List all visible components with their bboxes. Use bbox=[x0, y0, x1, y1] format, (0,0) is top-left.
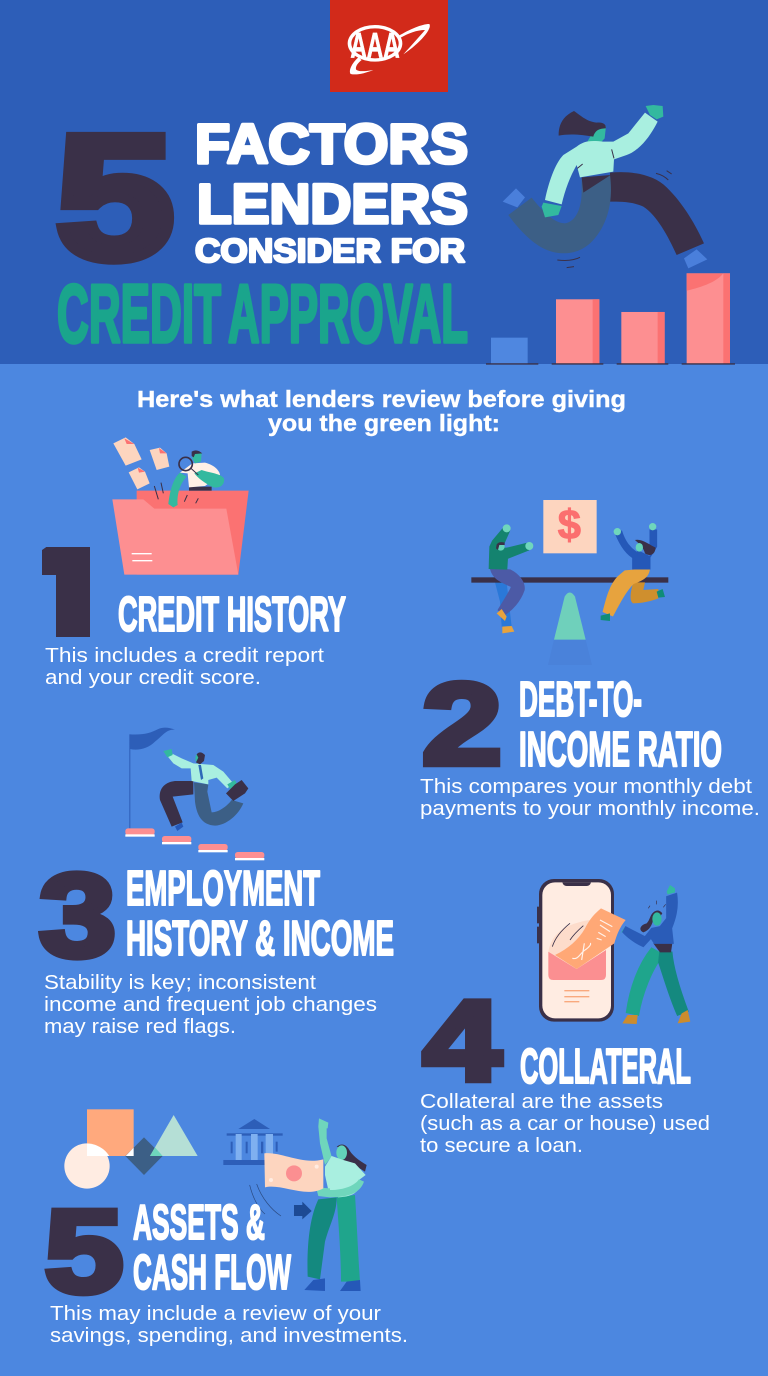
title bbox=[56, 100, 468, 360]
icon: man climbing steps to flag bbox=[125, 728, 264, 860]
title: big number 5: 5 bbox=[56, 100, 174, 296]
text block: This includes a credit report bbox=[45, 644, 324, 667]
text block: income and frequent job changes bbox=[44, 993, 377, 1016]
icon: bank and woman with cash bbox=[223, 1118, 367, 1291]
heading bbox=[126, 862, 394, 966]
icon: folder with man and documents bbox=[112, 437, 249, 575]
subtitle: Here's what lenders review before giving bbox=[137, 386, 626, 412]
heading: ASSETS & bbox=[133, 1196, 265, 1250]
panel: header band bbox=[0, 0, 768, 364]
icon: geometric shapes bbox=[64, 1109, 198, 1189]
number 4: 4 bbox=[423, 978, 501, 1105]
title: CREDIT APPROVAL: APPROVAL bbox=[228, 267, 468, 360]
bar chart bbox=[486, 273, 735, 364]
number 5: 5 bbox=[44, 1186, 124, 1318]
text block: This compares your monthly debt bbox=[420, 775, 752, 798]
text block: savings, spending, and investments. bbox=[50, 1324, 408, 1347]
title: LENDERS: LENDERS bbox=[197, 172, 468, 235]
heading bbox=[133, 1196, 291, 1300]
title: CREDIT APPROVAL: CREDIT bbox=[57, 267, 221, 360]
icon: seesaw with dollar card bbox=[471, 500, 668, 665]
text block: payments to your monthly income. bbox=[420, 797, 760, 820]
logo: AAA: AAA bbox=[350, 26, 400, 65]
text block bbox=[50, 1302, 408, 1347]
heading bbox=[519, 673, 722, 777]
text block bbox=[44, 971, 377, 1038]
logo: AAA bbox=[330, 0, 448, 92]
text block: Stability is key; inconsistent bbox=[44, 971, 316, 994]
subtitle: you the green light: bbox=[268, 410, 500, 436]
heading: EMPLOYMENT bbox=[126, 862, 320, 916]
number 2: 2 bbox=[422, 659, 502, 789]
heading: HISTORY & INCOME bbox=[126, 912, 394, 966]
icon: seesaw with dollar card: $ bbox=[558, 501, 581, 548]
text block bbox=[45, 644, 324, 689]
panel: factor 5 assets and cash flow bbox=[44, 1109, 408, 1347]
panel: factor 2 debt-to-income ratio bbox=[420, 500, 760, 820]
text block: This may include a review of your bbox=[50, 1302, 381, 1325]
icon: phone with loan document and woman bbox=[537, 879, 690, 1024]
text block: and your credit score. bbox=[45, 666, 261, 689]
heading: CASH FLOW bbox=[133, 1246, 291, 1300]
text block: may raise red flags. bbox=[44, 1015, 236, 1038]
panel: factor 1 credit history bbox=[39, 437, 346, 689]
panel: factor 3 employment history and income bbox=[39, 728, 394, 1038]
text block bbox=[420, 775, 760, 820]
number 1: 1 bbox=[39, 520, 103, 659]
title: CONSIDER FOR: CONSIDER FOR bbox=[195, 232, 465, 269]
panel: factor 4 collateral bbox=[420, 879, 710, 1157]
heading: CREDIT HISTORY bbox=[118, 588, 346, 642]
text block: (such as a car or house) used bbox=[420, 1112, 710, 1135]
text block bbox=[420, 1090, 710, 1157]
heading: DEBT-TO- bbox=[519, 673, 642, 727]
woman figure bbox=[503, 105, 707, 268]
illustration: jumping woman over bars bbox=[486, 105, 735, 364]
text block: Collateral are the assets bbox=[420, 1090, 663, 1113]
number 3: 3 bbox=[39, 850, 116, 982]
text block: to secure a loan. bbox=[420, 1134, 583, 1157]
subtitle bbox=[137, 386, 626, 436]
title: FACTORS: FACTORS bbox=[195, 112, 468, 175]
